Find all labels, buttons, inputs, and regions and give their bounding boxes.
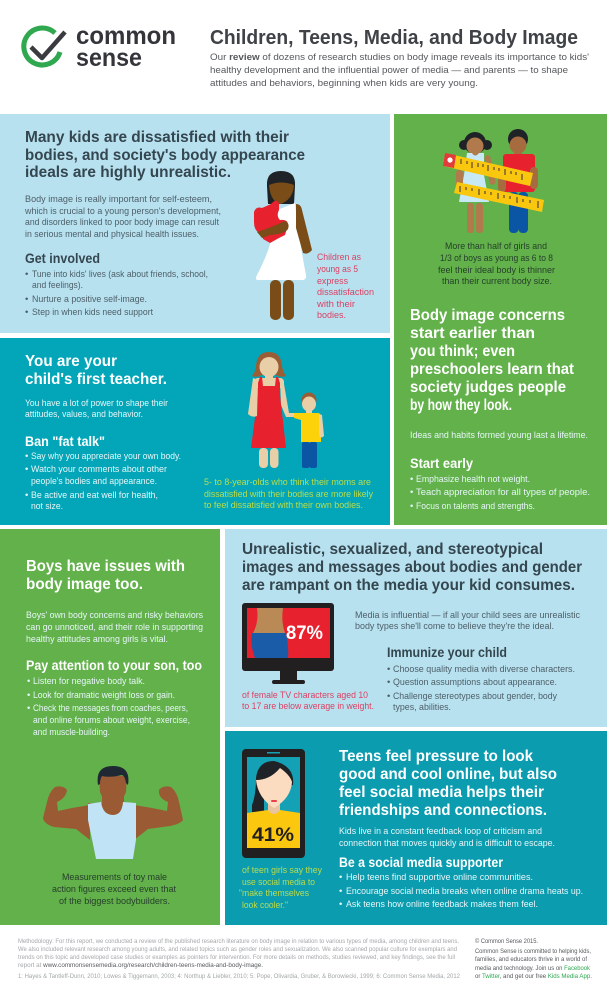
body text	[26, 610, 203, 645]
callout: children as young as 5: express	[317, 276, 348, 287]
bullet list: •	[25, 451, 28, 462]
heading	[25, 353, 167, 388]
heading: you think; even	[410, 343, 515, 360]
body text: Body image is really important for self-esteem,	[25, 194, 212, 205]
bullet list: Look for dramatic weight loss or gain.	[33, 690, 175, 701]
bullet list: •	[25, 307, 28, 318]
logo: sense	[76, 44, 142, 72]
heading: are rampant on the media your kid consumes.	[242, 577, 575, 594]
bullet list: •	[339, 886, 342, 897]
caption: more than half of girls: 1/3 of boys as young as 6 to 8	[440, 253, 553, 264]
heading: preschoolers learn that	[410, 361, 575, 378]
subheading: pay attention to your son: Pay attention to your son, too	[26, 658, 202, 673]
title: Children, Teens, Media, and Body Image	[210, 27, 578, 49]
body text: connection that moves quickly and is difficult to escape.	[339, 838, 555, 849]
callout: 41 percent caption	[239, 865, 322, 911]
footer: methodology: report at www.commonsensemedia.org/research/children-teens-media-and-body-image.	[18, 963, 263, 969]
subheading: ban fat talk: Ban "fat talk"	[25, 434, 105, 449]
bullet list: •	[410, 487, 413, 498]
bullet list: •	[25, 464, 28, 475]
bullet list: •	[339, 899, 342, 910]
body text: healthy attitudes among girls is vital.	[26, 634, 168, 645]
bullet list	[410, 474, 590, 512]
heading: bodies, and society's body appearance	[25, 147, 305, 164]
body text: attitudes, values, and behavior.	[25, 409, 143, 420]
heading: Many kids are dissatisfied with their	[25, 129, 289, 146]
footer: about common sense: families, and educators thrive in a world of	[475, 956, 587, 963]
icon: muscular man	[43, 766, 183, 859]
icon: girl and boy with measuring tapes	[443, 129, 544, 233]
footer: about common sense: or Twitter, and get our free Kids Media App.	[475, 973, 592, 980]
bullet list	[25, 451, 181, 512]
bullet list: Emphasize health not weight.	[416, 474, 530, 485]
body text: in serious mental and physical health issues.	[25, 229, 199, 240]
caption: toy action figures: Measurements of toy male	[62, 872, 167, 883]
body text	[355, 610, 580, 632]
heading: ideals are highly unrealistic.	[25, 164, 231, 181]
bullet list: and feelings).	[32, 280, 83, 291]
footer: methodology: Methodology: For this report, we conducted a review of the published research literature on body image in relation to various types of media, among children and teens.	[18, 939, 459, 945]
caption: more than half of girls: feel their ideal body is thinner	[438, 265, 555, 276]
panel: body image concerns start earlier	[394, 114, 607, 525]
body text: body types she'll come to believe they're the ideal.	[355, 621, 554, 632]
bullet list: Teach appreciation for all types of people.	[416, 487, 590, 498]
heading: society judges people	[410, 379, 566, 396]
heading	[339, 748, 557, 819]
bullet list: Help teens find supportive online communities.	[346, 872, 533, 883]
heading: Unrealistic, sexualized, and stereotypical	[242, 541, 543, 558]
callout: 41 percent caption: of teen girls say they	[242, 865, 322, 876]
heading	[410, 307, 575, 414]
callout: moms' dissatisfaction: to feel dissatisfied with their own bodies.	[204, 500, 363, 511]
subheading: get involved: Get involved	[25, 251, 100, 266]
callout: moms' dissatisfaction: dissatisfied with their bodies are more likely	[204, 489, 373, 500]
panel: you are your child's first teacher	[0, 338, 390, 525]
callout: 87 percent caption: to 17 are below average in weight.	[242, 701, 374, 712]
bullet list: Be active and eat well for health,	[31, 490, 158, 501]
callout: moms' dissatisfaction	[204, 477, 373, 511]
bullet list: Challenge stereotypes about gender, body	[393, 691, 557, 702]
heading	[242, 541, 582, 594]
body text: You have a lot of power to shape their	[25, 398, 168, 409]
heading: body image too.	[26, 576, 143, 593]
heading: good and cool online, but also	[339, 766, 557, 783]
callout: children as young as 5: with their	[316, 299, 355, 310]
bullet list: •	[339, 872, 342, 883]
bullet list: and muscle-building.	[33, 727, 110, 738]
bullet list: •	[410, 501, 413, 512]
bullet list	[27, 676, 190, 738]
bullet list	[339, 872, 583, 910]
heading: Teens feel pressure to look	[339, 748, 533, 765]
caption: toy action figures	[52, 872, 176, 907]
footer: about common sense: Common Sense is committed to helping kids,	[475, 948, 591, 955]
icon: phone with 41 percent: 41%	[252, 825, 294, 846]
callout: children as young as 5	[316, 252, 374, 321]
subheading: immunize your child: Immunize your child	[387, 645, 507, 660]
bullet list: Step in when kids need support	[32, 307, 153, 318]
heading: Boys have issues with	[26, 558, 185, 575]
bullet list: not size.	[31, 501, 63, 512]
bullet list	[25, 269, 208, 318]
bullet list: Listen for negative body talk.	[33, 676, 145, 687]
body text	[25, 398, 168, 420]
logo	[24, 22, 176, 72]
bullet list: Question assumptions about appearance.	[393, 677, 557, 688]
bullet list: •	[27, 690, 30, 701]
intro text: attitudes and behaviors, beginning when kids are very young.	[210, 78, 478, 89]
bullet list: •	[27, 676, 30, 687]
bullet list: Say why you appreciate your own body.	[31, 451, 181, 462]
heading: You are your	[25, 353, 117, 370]
bullet list: •	[387, 677, 390, 688]
bullet list: •	[387, 664, 390, 675]
footer: about common sense: media and technology. Join us on Facebook	[475, 965, 591, 972]
bullet list	[387, 664, 575, 713]
bullet list: Ask teens how online feedback makes them feel.	[346, 899, 538, 910]
heading: child's first teacher.	[25, 371, 167, 388]
subheading: start early: Start early	[410, 456, 473, 471]
footer: about common sense	[475, 937, 592, 980]
caption: more than half of girls: More than half of girls and	[445, 241, 547, 252]
intro text: Our review of dozens of research studies on body image reveals its importance to kids'	[210, 52, 589, 63]
body text: which is crucial to a young person's development,	[24, 206, 221, 217]
callout: 87 percent caption	[242, 690, 374, 712]
bullet list: Check the messages from coaches, peers,	[33, 703, 188, 714]
body text	[339, 826, 555, 849]
heading: friendships and connections.	[339, 802, 547, 819]
bullet list: •	[25, 269, 28, 280]
callout: 41 percent caption: look cooler."	[242, 900, 288, 911]
bullet list: •	[25, 294, 28, 305]
callout: children as young as 5: dissatisfaction	[317, 287, 374, 298]
footer: methodology	[18, 939, 461, 980]
body text: Media is influential — if all your child sees are unrealistic	[355, 610, 580, 621]
heading: Body image concerns	[410, 307, 565, 324]
heading: images and messages about bodies and gender	[242, 559, 582, 576]
callout: 87 percent caption: of female TV characters aged 10	[242, 690, 368, 701]
footer: methodology: trends on this topic and developed case studies or examples as pointers for intervention. For more details on methods, studies reviewed, and key findings, see the full	[18, 955, 455, 961]
bullet list: people's bodies and appearance.	[31, 476, 157, 487]
heading: by how they look.	[410, 397, 512, 414]
bullet list: •	[27, 703, 30, 714]
bullet list: Tune into kids' lives (ask about friends, school,	[32, 269, 208, 280]
caption: toy action figures: action figures exceed even that	[52, 884, 176, 895]
footer: methodology: We also included relevant research among young adults, and related topics such as gender roles and sexualization. We also scanned popular culture for exemplars and	[18, 947, 457, 953]
logo: common	[76, 22, 176, 50]
caption: more than half of girls	[438, 241, 555, 287]
bullet list: •	[387, 691, 390, 702]
icon: tv with 87 percent	[242, 603, 334, 684]
panel: boys have issues with body image	[0, 529, 220, 925]
panel: many kids are dissatisfied	[0, 114, 390, 333]
bullet list: •	[410, 474, 413, 485]
callout: 41 percent caption: "make themselves	[239, 888, 309, 899]
caption: more than half of girls: than their current body size.	[442, 276, 552, 287]
intro text: healthy development and the influential power of media — and parents — to shape	[210, 65, 568, 76]
bullet list: Focus on talents and strengths.	[416, 501, 535, 512]
body text: can go unnoticed, and their role in supporting	[26, 622, 203, 633]
bullet list: and online forums about weight, exercise,	[33, 715, 190, 726]
callout: children as young as 5: Children as	[317, 252, 361, 263]
bullet list: •	[25, 490, 28, 501]
footer: methodology: 1: Hayes & Tantleff-Dunn, 2010; Lowes & Tiggemann, 2003; 4: Northup & Liebler, 2010; 5: Pope, Olivardia, Gruber, & Borowiecki, 1999; 6: Common Sense Media, 2012	[18, 974, 461, 980]
body text: and disorders linked to poor body image can result	[25, 217, 219, 228]
heading	[25, 129, 305, 181]
callout: children as young as 5: young as 5	[317, 264, 358, 275]
footer: about common sense: © Common Sense 2015.	[475, 937, 538, 945]
bullet list: types, abilities.	[393, 702, 451, 713]
callout: moms' dissatisfaction: 5- to 8-year-olds who think their moms are	[204, 477, 371, 488]
body text: Kids live in a constant feedback loop of criticism and	[339, 826, 542, 837]
icon: tv with 87 percent: 87%	[286, 623, 323, 644]
icon: phone with 41 percent	[242, 749, 305, 858]
intro text	[210, 52, 589, 89]
caption: toy action figures: of the biggest bodybuilders.	[59, 896, 170, 907]
panel: unrealistic media images	[225, 529, 607, 727]
bullet list: Watch your comments about other	[31, 464, 167, 475]
heading: start earlier than	[410, 325, 535, 342]
body text	[24, 194, 221, 240]
icon: girl with teddy bear	[254, 171, 312, 320]
callout: 41 percent caption: use social media to	[242, 877, 315, 888]
body text: Ideas and habits formed young last a lifetime.	[410, 430, 588, 441]
bullet list: Nurture a positive self-image.	[32, 294, 147, 305]
panel: teens and social media	[225, 731, 607, 925]
bullet list: Choose quality media with diverse characters.	[393, 664, 575, 675]
heading: feel social media helps their	[339, 784, 544, 801]
heading	[26, 558, 185, 593]
subheading: be a social media supporter: Be a social media supporter	[339, 855, 504, 870]
header	[24, 22, 589, 89]
callout: children as young as 5: bodies.	[317, 310, 346, 321]
bullet list: Encourage social media breaks when online drama heats up.	[346, 886, 583, 897]
icon: mother and child	[248, 352, 324, 468]
body text: Boys' own body concerns and risky behaviors	[26, 610, 203, 621]
